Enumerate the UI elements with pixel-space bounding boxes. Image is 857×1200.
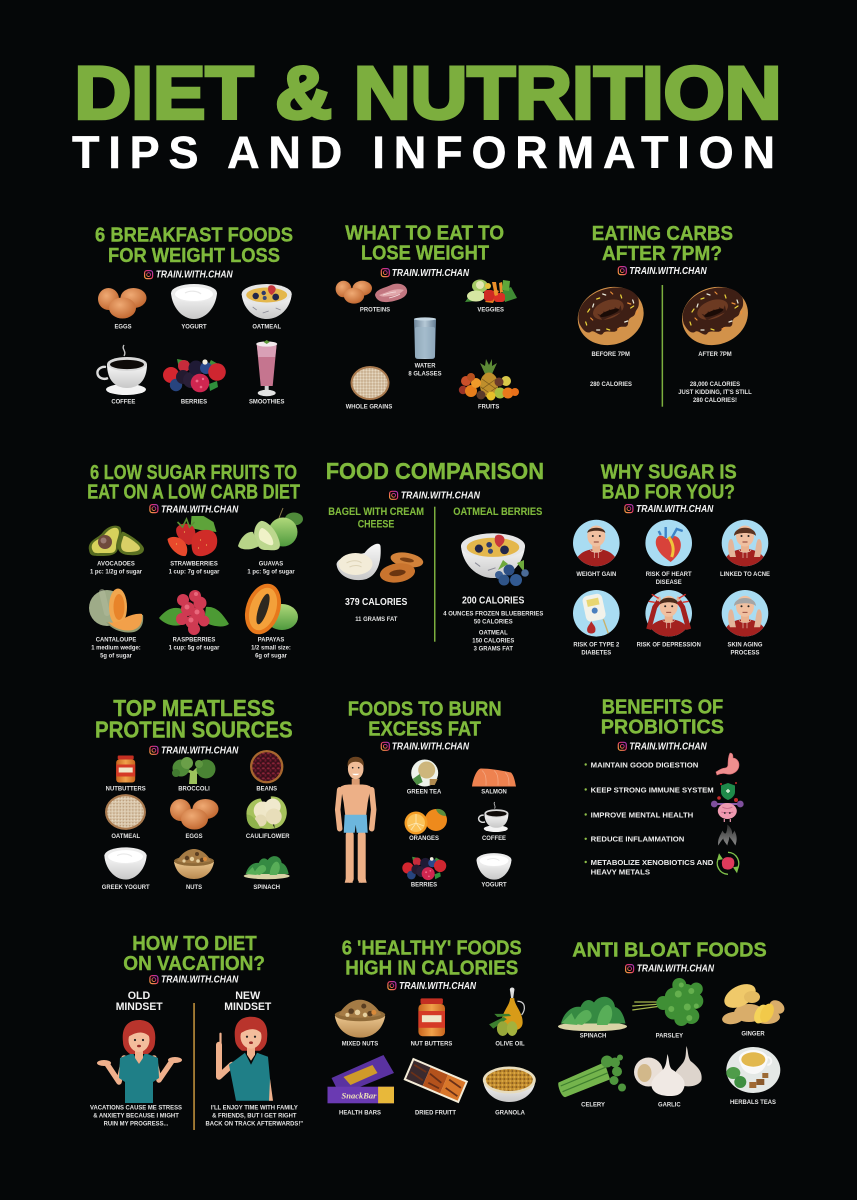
heading: WHY SUGAR IS <box>601 460 737 483</box>
handle: TRAIN.WITH.CHAN <box>392 268 470 279</box>
labels row two: GRANOLA <box>495 1109 525 1116</box>
labels row three: YOGURT <box>481 881 507 889</box>
labels row two <box>339 1109 525 1116</box>
panel: how to diet on vacation <box>90 932 303 1130</box>
caption: old mindset: VACATIONS CAUSE ME STRESS <box>90 1104 182 1112</box>
panel: why sugar is bad <box>573 460 770 657</box>
handle: TRAIN.WITH.CHAN <box>637 964 715 975</box>
heading: PROBIOTICS <box>601 715 724 738</box>
labels row one <box>114 323 281 331</box>
labels row one: NUTBUTTERS <box>106 785 146 793</box>
icon: beans <box>250 750 283 783</box>
old mindset heading: OLD <box>128 990 151 1002</box>
label: cantaloupe <box>91 636 141 660</box>
icon: ginger <box>720 979 787 1026</box>
icon: berries <box>163 359 226 392</box>
icon: heart <box>645 520 692 566</box>
label: heart disease: DISEASE <box>656 579 682 586</box>
subtitle: TIPS AND INFORMATION <box>72 127 775 178</box>
handle: TRAIN.WITH.CHAN <box>629 266 707 277</box>
icon: yogurt <box>477 853 511 880</box>
icon: dried fruit <box>403 1058 468 1103</box>
icon: berries <box>402 857 446 880</box>
label: guavas <box>247 560 295 575</box>
bullet list: HEAVY METALS <box>591 867 650 876</box>
labels row one: OLIVE OIL <box>495 1040 525 1047</box>
icon: coffee <box>97 345 147 395</box>
heading: HOW TO DIET <box>132 932 257 955</box>
before text: BEFORE 7PM <box>592 351 630 358</box>
label: heart disease <box>646 571 692 586</box>
label: avocadoes: 1 pc: 1/2g of sugar <box>90 568 143 575</box>
stats: oatmeal: 3 GRAMS FAT <box>474 645 513 652</box>
bullet list: IMPROVE MENTAL HEALTH <box>591 810 693 819</box>
heading: PROTEIN SOURCES <box>95 717 293 743</box>
icon: celery <box>556 1054 626 1098</box>
labels row one: YOGURT <box>181 323 207 331</box>
label: water <box>408 362 442 377</box>
heading: EAT ON A LOW CARB DIET <box>87 480 300 503</box>
handle: TRAIN.WITH.CHAN <box>156 270 233 281</box>
heading <box>87 461 300 503</box>
illustration: woman shrugging <box>97 1020 182 1103</box>
icon: spinach <box>244 856 290 879</box>
label: cantaloupe: 5g of sugar <box>100 652 132 660</box>
icon: brain <box>711 801 744 822</box>
icon: glucose meter <box>573 590 620 637</box>
heading: FOODS TO BURN <box>348 698 502 721</box>
after text: AFTER 7PM <box>698 351 732 358</box>
label: papayas: PAPAYAS <box>258 636 284 644</box>
panel: food comparison <box>326 458 544 652</box>
icon: flame <box>718 824 737 846</box>
icon: fruits <box>459 359 519 400</box>
icon: herbal tea <box>726 1047 780 1093</box>
label: raspberries: RASPBERRIES <box>173 636 215 644</box>
heading <box>592 222 733 265</box>
heading: LOSE WEIGHT <box>361 241 489 264</box>
after text: 28,000 CALORIES <box>690 381 740 388</box>
label: weight gain: WEIGHT GAIN <box>576 571 617 578</box>
handle: TRAIN.WITH.CHAN <box>392 741 470 752</box>
label: papayas: 6g of sugar <box>255 652 287 660</box>
label: strawberries: 1 cup: 7g of sugar <box>169 568 220 575</box>
caption: new mindset: & FRIENDS, BUT I GET RIGHT <box>212 1112 297 1120</box>
stats: bagel: 11 GRAMS FAT <box>355 616 398 623</box>
label: avocadoes <box>90 560 143 575</box>
labels row two: EGGS <box>185 833 203 840</box>
bullet list: METABOLIZE XENOBIOTICS AND <box>591 858 714 867</box>
stats: oatmeal: 50 CALORIES <box>474 618 513 626</box>
icon: greek yogurt <box>104 847 147 880</box>
stats: bagel: 379 CALORIES <box>345 597 408 608</box>
heading: TOP MEATLESS <box>113 695 275 721</box>
before text: 280 CALORIES <box>590 381 632 388</box>
icon: nut butters <box>418 998 445 1036</box>
label: strawberries <box>169 560 220 575</box>
icon: oatmeal and blueberries <box>461 533 529 586</box>
panel: eating carbs after 7pm <box>569 222 756 407</box>
icon: salmon <box>472 768 516 786</box>
icon: guava <box>238 508 303 550</box>
icon: papaya <box>239 579 298 639</box>
labels row one: MIXED NUTS <box>342 1040 378 1047</box>
subheading: oatmeal berries: OATMEAL BERRIES <box>453 506 542 518</box>
bullet list: KEEP STRONG IMMUNE SYSTEM <box>591 785 714 794</box>
labels row two <box>111 833 290 840</box>
labels row two: DRIED FRUITT <box>415 1109 456 1116</box>
icon: acne <box>722 520 768 567</box>
handle: TRAIN.WITH.CHAN <box>161 975 239 986</box>
icon: weight gain <box>573 520 620 567</box>
heading: AFTER 7PM? <box>602 242 722 265</box>
handle: TRAIN.WITH.CHAN <box>629 741 707 752</box>
heading: HIGH IN CALORIES <box>345 956 518 979</box>
label: aging: SKIN AGING <box>728 641 762 649</box>
label: papayas <box>251 636 291 660</box>
after text: JUST KIDDING, IT'S STILL <box>678 389 752 396</box>
label: papayas: 1/2 small size: <box>251 644 291 652</box>
labels row one: GINGER <box>741 1030 765 1037</box>
heading: ON VACATION? <box>123 952 265 975</box>
icon: oatmeal <box>242 284 292 319</box>
heading <box>123 932 265 975</box>
before text <box>590 351 632 388</box>
panel: benefits of probiotics <box>584 695 744 876</box>
heading <box>601 460 737 503</box>
labels row three: BERRIES <box>411 881 437 889</box>
heading: FOOD COMPARISON <box>326 458 544 484</box>
labels row two: HERBALS TEAS <box>730 1099 776 1106</box>
labels row one: BROCCOLI <box>178 785 210 793</box>
icon: whole grains <box>350 366 390 400</box>
labels row one: GREEN TEA <box>407 788 442 795</box>
heading: 6 BREAKFAST FOODS <box>95 224 293 246</box>
icon: granola <box>483 1066 536 1102</box>
heading: FOR WEIGHT LOSS <box>108 244 280 267</box>
labels row three: SPINACH <box>253 884 280 891</box>
heading: ANTI BLOAT FOODS <box>572 939 767 962</box>
panel: anti bloat foods <box>556 939 787 1108</box>
bullet list: MAINTAIN GOOD DIGESTION <box>591 760 698 769</box>
labels row two: GARLIC <box>658 1101 681 1108</box>
label: aging: PROCESS <box>731 649 759 657</box>
stats: oatmeal: 150 CALORIES <box>472 637 514 644</box>
heading: BAD FOR YOU? <box>602 480 735 503</box>
heading: 6 LOW SUGAR FRUITS TO <box>90 461 297 484</box>
labels row two: COFFEE <box>111 398 135 405</box>
icon: eggs <box>170 799 218 830</box>
label: water: WATER <box>415 362 436 369</box>
labels row two: OATMEAL <box>111 833 140 840</box>
heading: EATING CARBS <box>592 222 733 245</box>
label: proteins: PROTEINS <box>360 306 390 313</box>
labels row three <box>411 881 507 889</box>
labels row two: CAULIFLOWER <box>246 833 290 840</box>
after text <box>678 351 752 404</box>
icon: eggs <box>98 288 146 318</box>
labels row two: BERRIES <box>181 398 207 405</box>
icon: strawberries <box>168 516 217 556</box>
stats: oatmeal: 4 OUNCES FROZEN BLUEBERRIES <box>443 610 543 618</box>
new mindset heading: MINDSET <box>224 1001 272 1013</box>
stats: bagel <box>345 597 408 623</box>
labels row one: PARSLEY <box>656 1032 684 1039</box>
caption: new mindset: BACK ON TRACK AFTERWARDS!" <box>206 1120 303 1128</box>
icon: raspberries <box>159 590 229 635</box>
caption: new mindset <box>206 1104 303 1128</box>
labels row one <box>106 785 277 793</box>
panel: foods to burn fat <box>338 698 516 889</box>
label: fruits: FRUITS <box>478 403 499 411</box>
label: water: 8 GLASSES <box>408 370 442 377</box>
icon: yogurt <box>171 284 217 319</box>
heading <box>601 695 724 738</box>
label: guavas: 1 pc: 5g of sugar <box>247 568 295 575</box>
handle: TRAIN.WITH.CHAN <box>161 745 239 756</box>
icon: avocado <box>89 526 144 556</box>
labels row two <box>581 1099 776 1108</box>
icon: coffee <box>479 802 508 832</box>
label: guavas: GUAVAS <box>259 560 283 567</box>
new mindset heading: NEW <box>235 990 261 1002</box>
label: cantaloupe: CANTALOUPE <box>96 636 136 644</box>
labels row three <box>102 884 280 891</box>
icon: veggies <box>465 280 517 303</box>
icon: garlic <box>634 1046 702 1096</box>
panel: healthy foods high in calories <box>328 936 536 1116</box>
caption: old mindset <box>90 1104 182 1128</box>
icon: parsley <box>632 978 703 1026</box>
caption: new mindset: I'LL ENJOY TIME WITH FAMILY <box>211 1104 298 1112</box>
icon: depression <box>645 590 692 637</box>
divider <box>434 507 436 642</box>
illustration: man <box>338 757 374 883</box>
handle: TRAIN.WITH.CHAN <box>399 981 477 992</box>
labels row one: BEANS <box>256 785 277 793</box>
stats: oatmeal: OATMEAL <box>479 629 508 636</box>
handle: TRAIN.WITH.CHAN <box>161 504 239 515</box>
divider <box>662 285 663 407</box>
after text: 280 CALORIES! <box>693 397 737 404</box>
icon: metabolism cycle <box>717 852 739 874</box>
bullet list <box>584 760 714 876</box>
label: raspberries: 1 cup: 5g of sugar <box>169 644 220 652</box>
icon: proteins <box>336 281 407 304</box>
icon: immune shield <box>717 782 738 802</box>
icon: cantaloupe <box>89 588 143 633</box>
illustration: woman pointing <box>219 1017 273 1101</box>
heading: BENEFITS OF <box>602 695 723 718</box>
panel: 6 breakfast foods <box>95 224 293 405</box>
heading: WHAT TO EAT TO <box>345 221 504 244</box>
labels row one <box>342 1040 525 1047</box>
label: strawberries: STRAWBERRIES <box>170 560 218 567</box>
label: type 2 diabetes: RISK OF TYPE 2 <box>573 641 620 649</box>
labels row three: GREEK YOGURT <box>102 884 150 891</box>
labels row two: SMOOTHIES <box>249 398 284 405</box>
label: heart disease: RISK OF HEART <box>646 571 692 578</box>
icon: oatmeal <box>105 794 146 830</box>
divider <box>193 1003 195 1130</box>
label: aging <box>728 641 762 657</box>
icon: spinach <box>558 997 627 1031</box>
icon: oranges <box>404 809 447 834</box>
icon: health bars <box>328 1055 394 1103</box>
heading <box>95 224 293 267</box>
new mindset heading <box>224 990 272 1013</box>
icon: smoothie <box>256 340 277 396</box>
icon: nuts <box>174 849 214 879</box>
label: whole grains: WHOLE GRAINS <box>346 403 392 411</box>
caption: old mindset: & ANXIETY BECAUSE I MIGHT <box>93 1112 179 1120</box>
icon: mixed nuts <box>335 1000 385 1038</box>
labels row one <box>407 788 507 795</box>
icon: broccoli <box>172 757 216 784</box>
icon: aging <box>722 590 768 637</box>
heading <box>348 698 502 741</box>
labels row two: CELERY <box>581 1101 606 1108</box>
label: cantaloupe: 1 medium wedge: <box>91 644 141 652</box>
heading: EXCESS FAT <box>368 718 481 741</box>
icon: green tea <box>411 760 438 786</box>
label: avocadoes: AVOCADOES <box>97 560 135 567</box>
old mindset heading <box>116 990 163 1013</box>
icon: water <box>414 317 436 359</box>
labels row two: COFFEE <box>482 835 506 842</box>
bullet list: REDUCE INFLAMMATION <box>591 835 684 844</box>
labels row one: SPINACH <box>580 1032 607 1039</box>
icon: donut after <box>674 278 756 354</box>
stats: oatmeal <box>443 595 543 652</box>
labels row two: ORANGES <box>409 835 439 842</box>
labels row one: SALMON <box>481 788 507 795</box>
icon: donut before <box>569 278 652 354</box>
labels row one: EGGS <box>114 323 132 331</box>
icon: nut butter <box>116 756 135 782</box>
subheading: bagel: BAGEL WITH CREAM <box>328 506 424 518</box>
subheading: bagel <box>328 506 424 530</box>
labels row one: OATMEAL <box>252 323 281 331</box>
panel: what to eat to lose weight <box>336 221 519 411</box>
subheading: bagel: CHEESE <box>358 518 394 530</box>
icon: olive oil <box>489 987 524 1036</box>
panel: low sugar fruits <box>87 461 303 660</box>
stats: oatmeal: 200 CALORIES <box>462 595 525 606</box>
icon: cauliflower <box>246 796 287 829</box>
old mindset heading: MINDSET <box>116 1001 163 1013</box>
labels row one: NUT BUTTERS <box>411 1040 452 1047</box>
label: veggies: VEGGIES <box>477 306 504 313</box>
icon: cream cheese and bagel <box>336 544 424 585</box>
caption: old mindset: RUIN MY PROGRESS... <box>104 1120 169 1128</box>
labels row two <box>111 398 284 405</box>
label: type 2 diabetes: DIABETES <box>581 649 611 657</box>
label: acne: LINKED TO ACNE <box>720 571 770 578</box>
label: depression: RISK OF DEPRESSION <box>637 641 701 649</box>
title: Diet & Nutrition: DIET & NUTRITION <box>74 52 782 135</box>
panel: meatless protein <box>95 695 293 891</box>
heading <box>95 695 293 743</box>
labels row three: NUTS <box>186 884 202 891</box>
labels row one <box>580 1030 765 1039</box>
icon: stomach <box>716 753 739 775</box>
heading: 6 'HEALTHY' FOODS <box>342 936 522 959</box>
labels row two <box>409 835 506 842</box>
label: raspberries <box>169 636 220 652</box>
heading <box>345 221 504 264</box>
label: type 2 diabetes <box>573 641 620 657</box>
heading <box>342 936 522 979</box>
labels row two: HEALTH BARS <box>339 1109 381 1116</box>
handle: TRAIN.WITH.CHAN <box>636 504 714 515</box>
handle: TRAIN.WITH.CHAN <box>401 490 481 501</box>
